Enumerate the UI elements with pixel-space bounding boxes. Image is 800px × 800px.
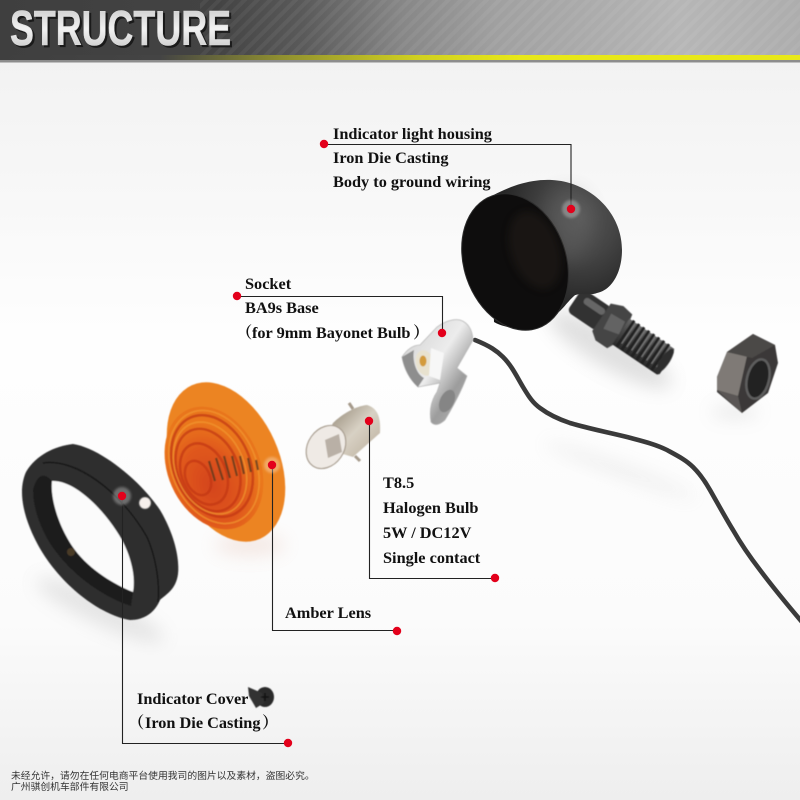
callout: amber lens <box>264 457 401 635</box>
callout: indicator cover: Indicator Cover <box>137 689 248 708</box>
callout: indicator light housing: Indicator light housing <box>333 124 492 143</box>
icon: hex nut <box>717 334 778 413</box>
icon: halogen bulb <box>298 403 380 476</box>
callout: indicator cover: Iron Die Casting <box>145 713 260 732</box>
callout: halogen bulb: 5W / DC12V <box>383 523 472 542</box>
soft shadows <box>31 299 759 652</box>
footer notice: 未经允许，请勿在任何电商平台使用我司的图片以及素材，盗图必究。 <box>11 769 315 782</box>
icon: indicator light housing <box>444 179 622 345</box>
callout: indicator cover <box>113 487 292 747</box>
callout: socket <box>233 274 446 342</box>
icon: indicator cover ring <box>22 444 178 620</box>
icon: screw <box>248 687 274 708</box>
callout: socket: ） <box>413 323 429 342</box>
callout: indicator cover: ） <box>262 713 278 732</box>
callout: halogen bulb <box>365 417 499 582</box>
title: STRUCTURE <box>10 2 231 56</box>
callout: indicator light housing <box>320 124 580 218</box>
icon: threaded bolt <box>562 282 681 381</box>
title: STRUCTURE <box>12 4 233 58</box>
callout: indicator light housing: Body to ground wiring <box>333 172 491 191</box>
footer notice <box>11 769 315 793</box>
callout: socket: Socket <box>245 274 292 293</box>
callout: indicator light housing: Iron Die Casting <box>333 148 448 167</box>
callout: halogen bulb: Halogen Bulb <box>383 498 478 517</box>
callout: socket: BA9s Base <box>245 298 319 317</box>
icon: socket <box>402 320 473 425</box>
callout: socket: （ <box>236 323 252 342</box>
footer notice: 广州骐创机车部件有限公司 <box>11 780 129 793</box>
callout: halogen bulb: Single contact <box>383 548 481 567</box>
callout: socket: for 9mm Bayonet Bulb <box>252 323 410 342</box>
callout: halogen bulb: T8.5 <box>383 473 414 492</box>
callout: amber lens: Amber Lens <box>285 603 371 622</box>
wire <box>475 340 800 622</box>
icon: amber lens <box>143 364 309 560</box>
callout: indicator cover: （ <box>128 713 144 732</box>
header banner <box>0 0 800 62</box>
